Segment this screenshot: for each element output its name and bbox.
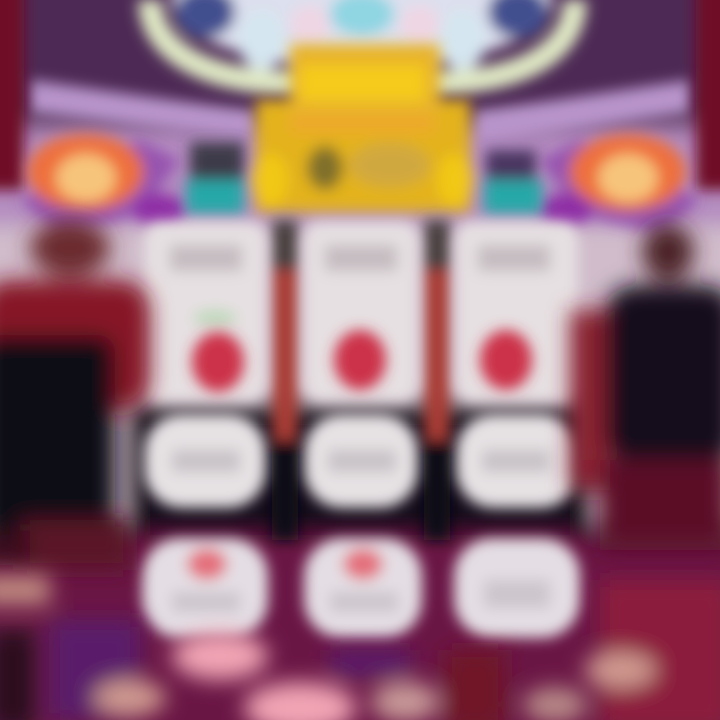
side curtains <box>0 0 720 190</box>
white cards: bottom row <box>142 538 580 638</box>
yellow central sign <box>252 44 473 212</box>
top ceiling ring <box>150 0 575 82</box>
right figure <box>570 224 720 550</box>
white cards: middle row <box>144 414 578 508</box>
left figure <box>0 220 150 570</box>
machine columns <box>272 220 450 540</box>
orange lights <box>20 134 700 235</box>
patterned floor <box>0 575 720 720</box>
red hearts <box>192 330 532 392</box>
teal toppers <box>186 142 542 214</box>
white cards: top row <box>144 222 578 402</box>
lavender bands <box>30 80 690 145</box>
